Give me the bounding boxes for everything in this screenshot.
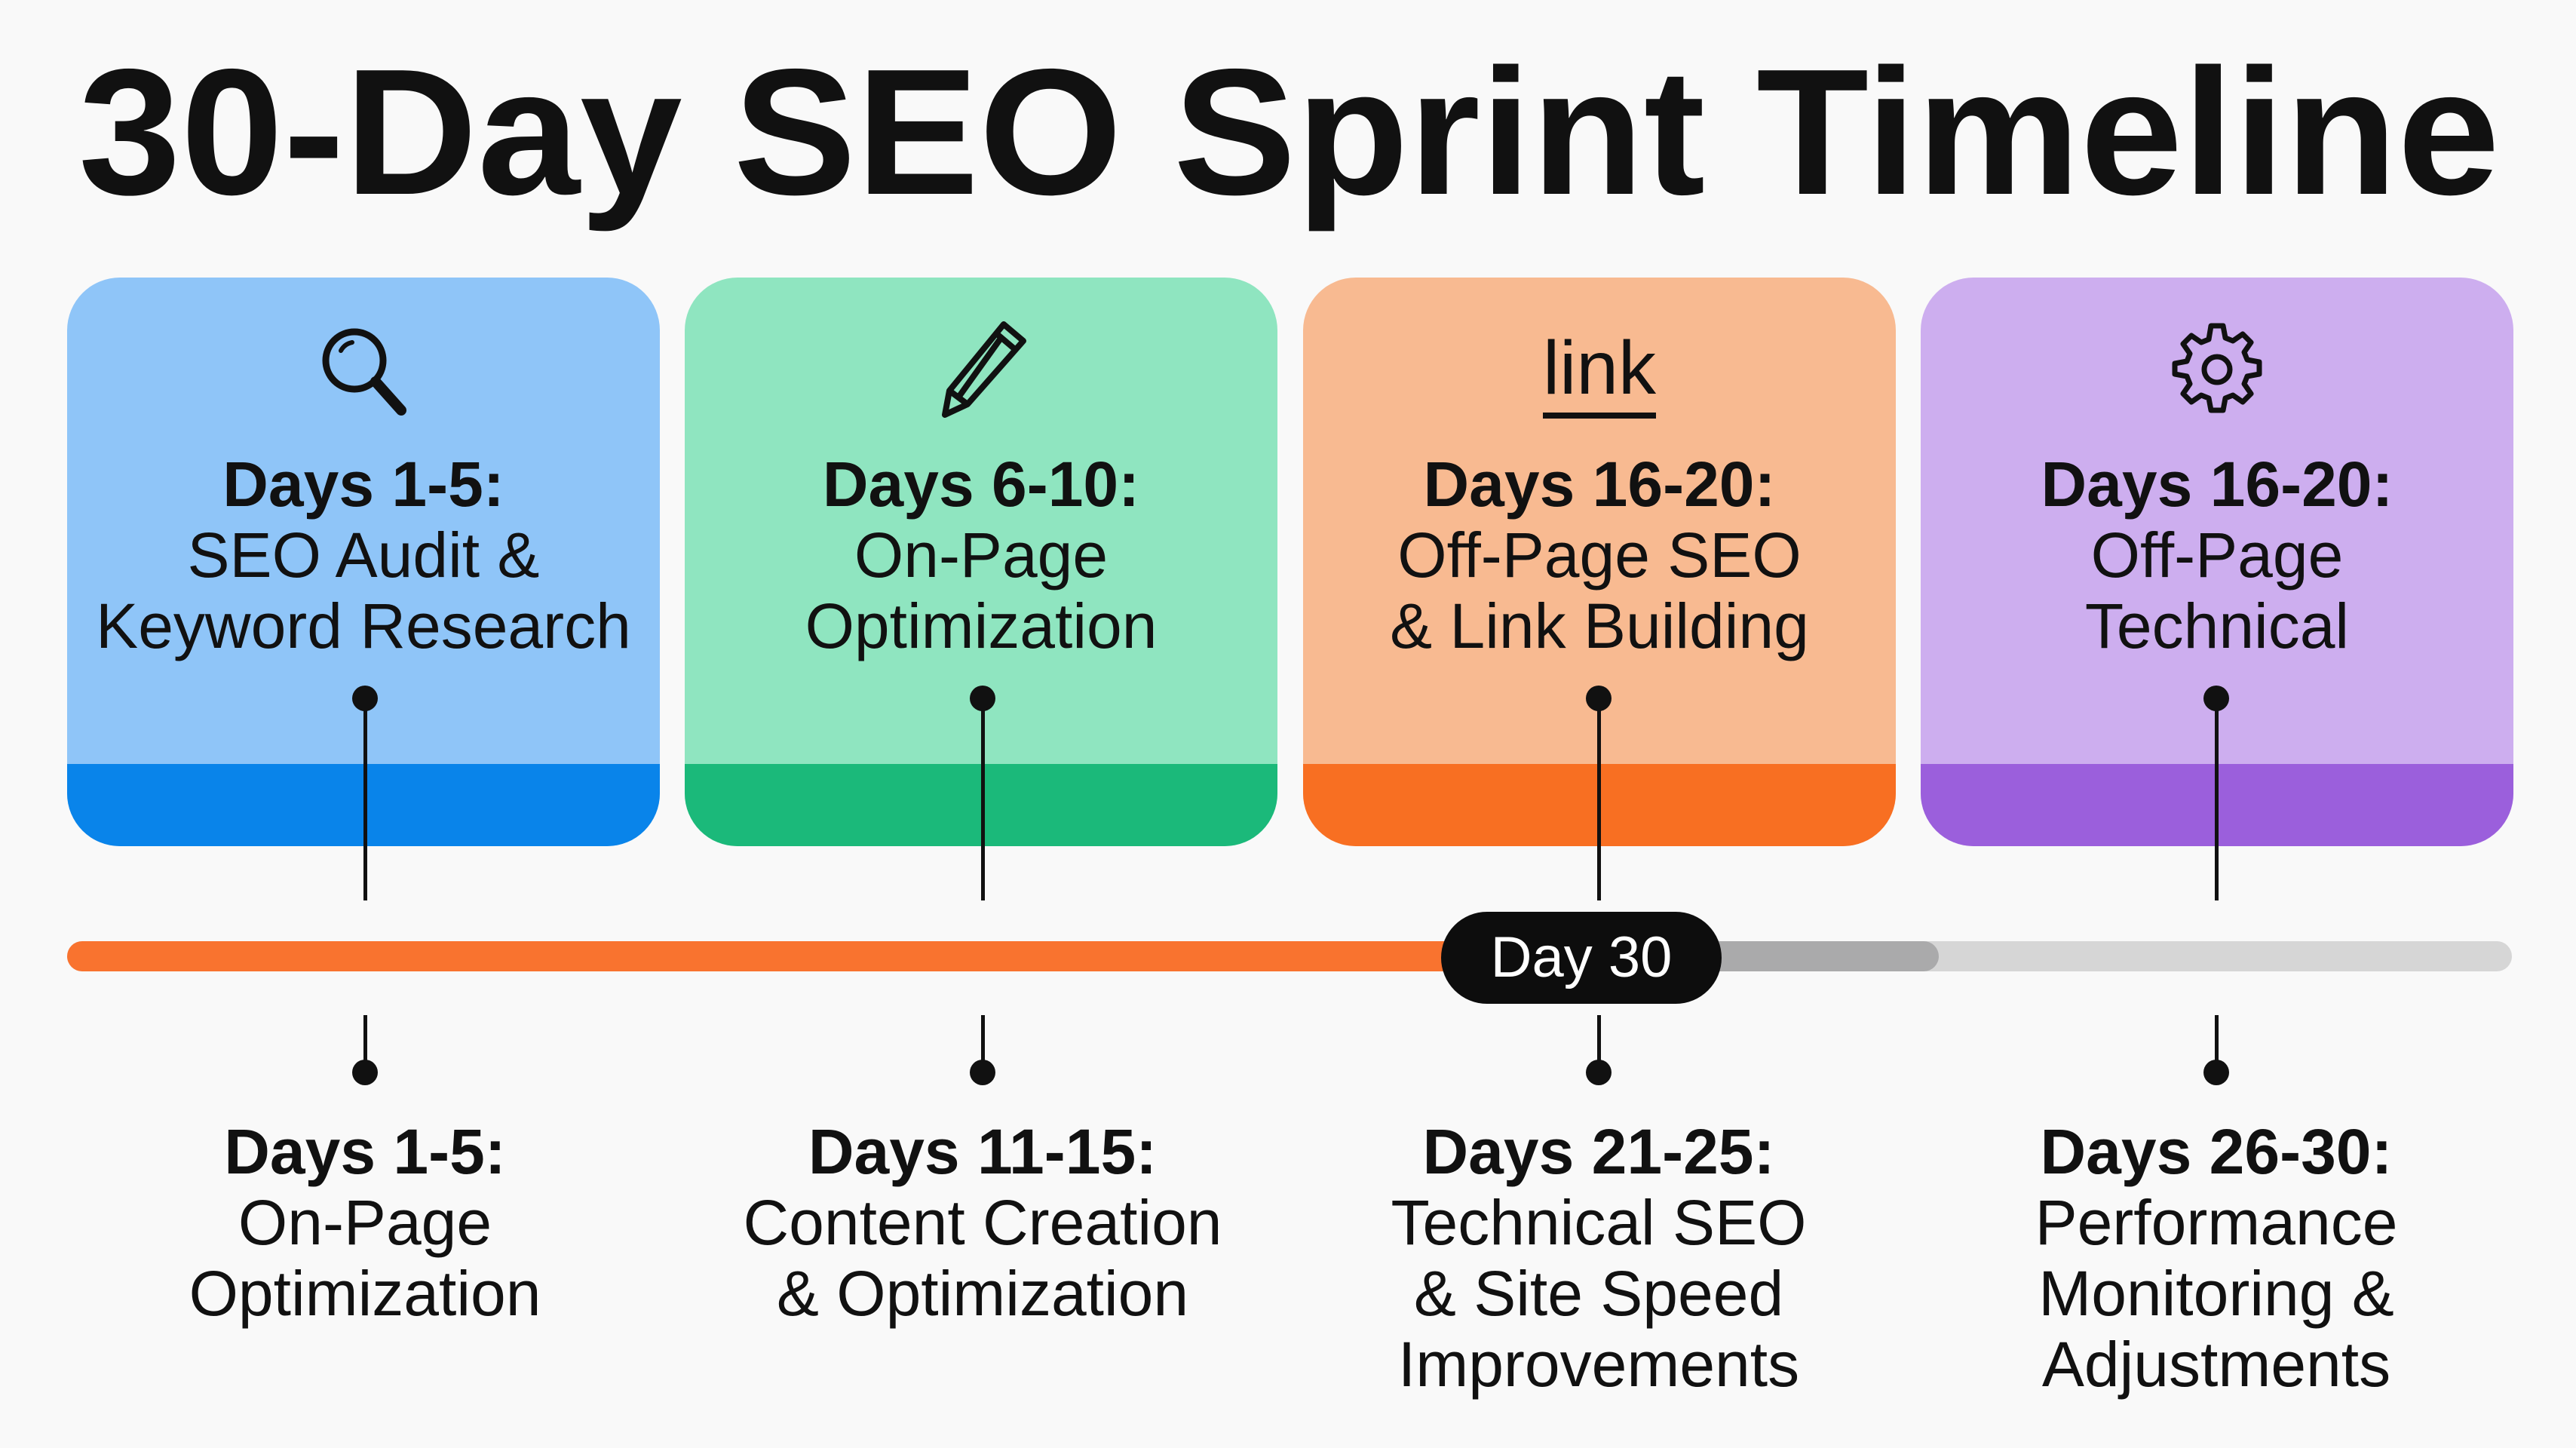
connector: lower 2 [970, 1015, 995, 1085]
text: lower 4: Monitoring & [2038, 1258, 2394, 1329]
icon: link word: link [1543, 326, 1656, 410]
text: technical: Days 16-20: [2041, 449, 2393, 520]
stripe: blue [67, 764, 660, 846]
text: off-page: Off-Page SEO [1397, 520, 1802, 591]
text: lower 3 [1391, 1116, 1806, 1400]
timeline bar [67, 941, 2512, 971]
panel: days 6-10 on-page [685, 278, 1277, 846]
title: 30-Day SEO Sprint Timeline [78, 32, 2500, 232]
panel: days 16-20 off-page [1303, 278, 1896, 846]
text: lower 2: Content Creation [743, 1187, 1222, 1258]
text: audit: SEO Audit & [188, 520, 539, 591]
text: audit: Days 1-5: [222, 449, 504, 520]
connector: upper 3 [1586, 686, 1612, 900]
text: lower 1: On-Page [238, 1187, 492, 1258]
icon: pencil [942, 321, 1026, 418]
text: lower 1: Days 1-5: [224, 1116, 506, 1187]
connector: upper 1 [352, 686, 378, 900]
connector: upper 2 [970, 686, 995, 900]
icon: magnifier [323, 329, 406, 416]
connector: lower 3 [1586, 1015, 1612, 1085]
text: technical: Technical [2085, 591, 2349, 661]
text: lower 1: Optimization [189, 1258, 541, 1329]
text: on-page: On-Page [854, 520, 1108, 591]
text: technical: Off-Page [2091, 520, 2343, 591]
icon: gear [2172, 323, 2262, 413]
text: audit: Keyword Research [96, 591, 631, 661]
text: lower 2: Days 11-15: [808, 1116, 1157, 1187]
text: lower 2 [743, 1116, 1222, 1329]
text: lower 4: Performance [2035, 1187, 2397, 1258]
text: off-page: & Link Building [1390, 591, 1809, 661]
panel: days 1-5 audit [67, 278, 660, 846]
stripe: orange [1303, 764, 1896, 846]
text: lower 3: Days 21-25: [1423, 1116, 1774, 1187]
text: lower 3: Improvements [1398, 1329, 1799, 1400]
text: on-page [805, 449, 1157, 661]
connector: upper 4 [2203, 686, 2229, 900]
marker: Day 30 [1441, 912, 1722, 1004]
text: off-page: Days 16-20: [1424, 449, 1775, 520]
stripe: green [685, 764, 1277, 846]
connector: lower 1 [352, 1015, 378, 1085]
text: lower 4: Adjustments [2042, 1329, 2390, 1400]
text: lower 2: & Optimization [777, 1258, 1188, 1329]
text: lower 4: Days 26-30: [2041, 1116, 2392, 1187]
connector: lower 4 [2203, 1015, 2229, 1085]
text: technical [2041, 449, 2393, 661]
text: lower 3: Technical SEO [1391, 1187, 1806, 1258]
text: on-page: Optimization [805, 591, 1157, 661]
text: lower 1 [189, 1116, 541, 1329]
stripe: purple [1921, 764, 2513, 846]
text: lower 4 [2035, 1116, 2397, 1400]
text: audit [96, 449, 631, 661]
text: on-page: Days 6-10: [823, 449, 1139, 520]
panel: days 16-20 technical [1921, 278, 2513, 846]
text: off-page [1390, 449, 1809, 661]
marker: Day 30: Day 30 [1491, 925, 1672, 989]
text: lower 3: & Site Speed [1414, 1258, 1783, 1329]
